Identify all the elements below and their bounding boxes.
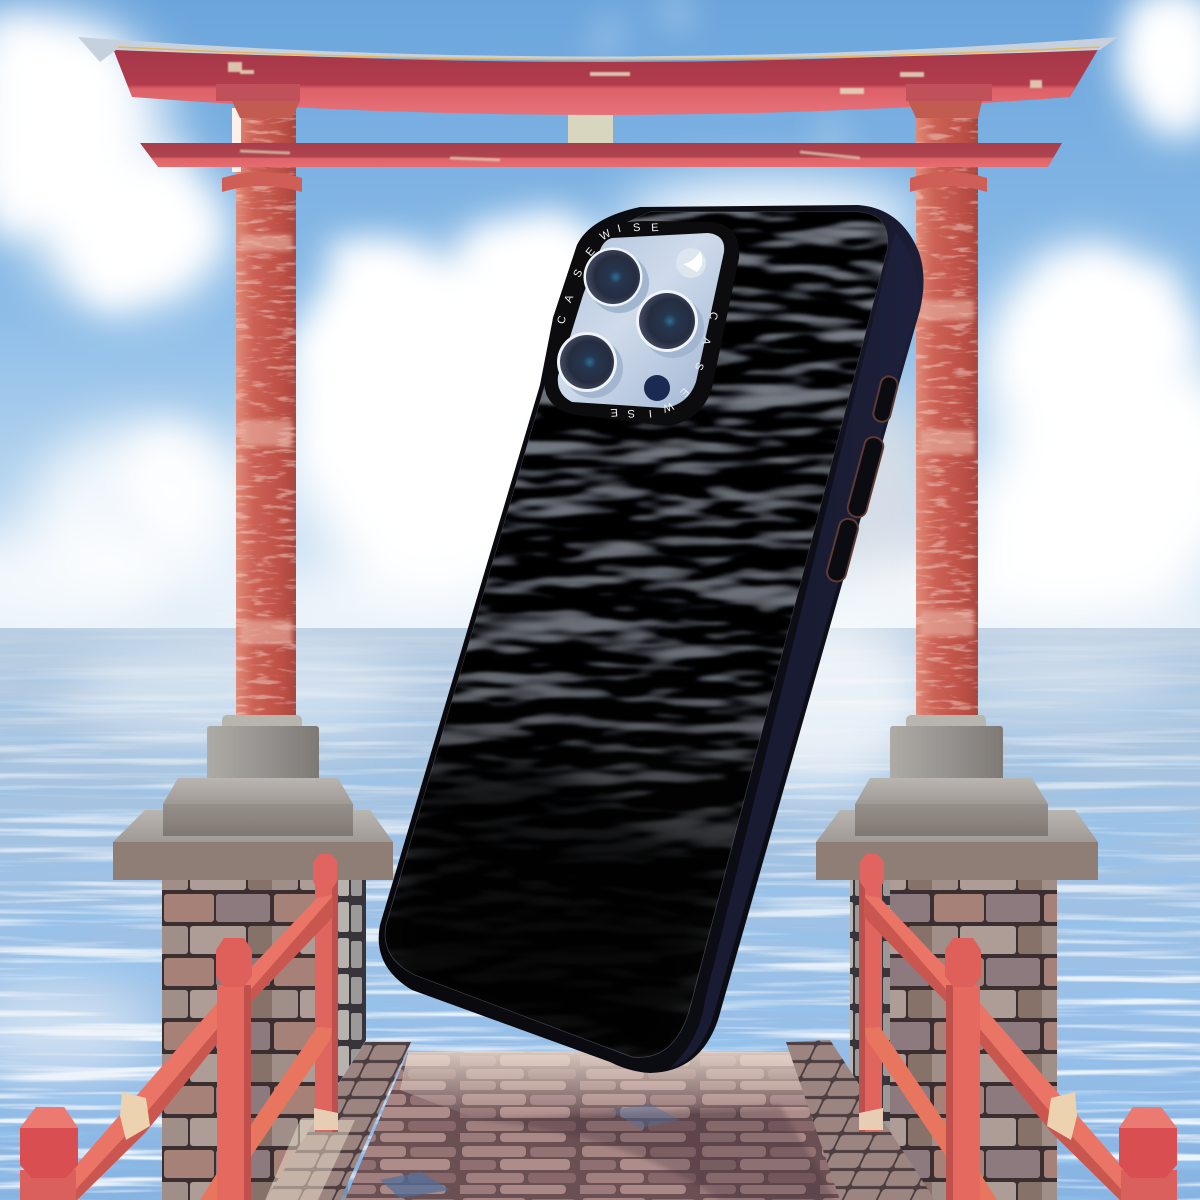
- centre strut: [568, 104, 613, 144]
- sea: [0, 610, 1200, 1200]
- left stone pier: [113, 715, 393, 1200]
- brand text right: E: [610, 406, 618, 418]
- case side buttons: [825, 375, 899, 583]
- brand text left: C: [555, 314, 569, 326]
- phone with ocean case: [370, 200, 930, 1080]
- brand text right: C: [706, 310, 720, 321]
- brand text right: A: [699, 336, 713, 347]
- sky background: [0, 0, 1200, 630]
- torii right column: [916, 100, 978, 720]
- torii top beam and roof: [78, 37, 1118, 115]
- left red railing: [20, 854, 338, 1200]
- stone walkway: [265, 1040, 935, 1200]
- lens top: [584, 248, 649, 313]
- brand text right: S: [627, 407, 635, 419]
- flash: [676, 248, 706, 278]
- lens bottom: [557, 332, 623, 398]
- case outer frame: [379, 205, 924, 1073]
- right red railing: [859, 854, 1177, 1200]
- brand text left: E: [584, 245, 598, 259]
- brand text right: E: [677, 385, 691, 399]
- brand text left: S: [632, 222, 641, 234]
- brand text left: [555, 222, 659, 326]
- clouds: [0, 0, 1200, 630]
- brand text right: [610, 310, 720, 419]
- brand text right: S: [692, 360, 706, 372]
- left column block and collar: [216, 84, 302, 192]
- brand text right: W: [661, 399, 675, 414]
- brand text left: A: [562, 293, 576, 305]
- brand text right: I: [648, 407, 652, 419]
- brand text left: W: [598, 227, 614, 243]
- torii lower tie beam: [140, 143, 1062, 167]
- brand text left: S: [571, 268, 585, 280]
- case back face: [385, 212, 888, 1057]
- brand text left: E: [651, 222, 659, 234]
- brand text left: I: [616, 223, 622, 235]
- case side highlight: [670, 232, 918, 1068]
- right column block and collar: [906, 84, 992, 192]
- lidar sensor: [644, 375, 670, 401]
- camera plate: [558, 233, 724, 408]
- right stone pier: [816, 715, 1098, 1200]
- ocean wave texture: [385, 212, 888, 1058]
- torii left column: [232, 100, 296, 720]
- lens right: [636, 290, 704, 358]
- camera bump: [545, 221, 739, 426]
